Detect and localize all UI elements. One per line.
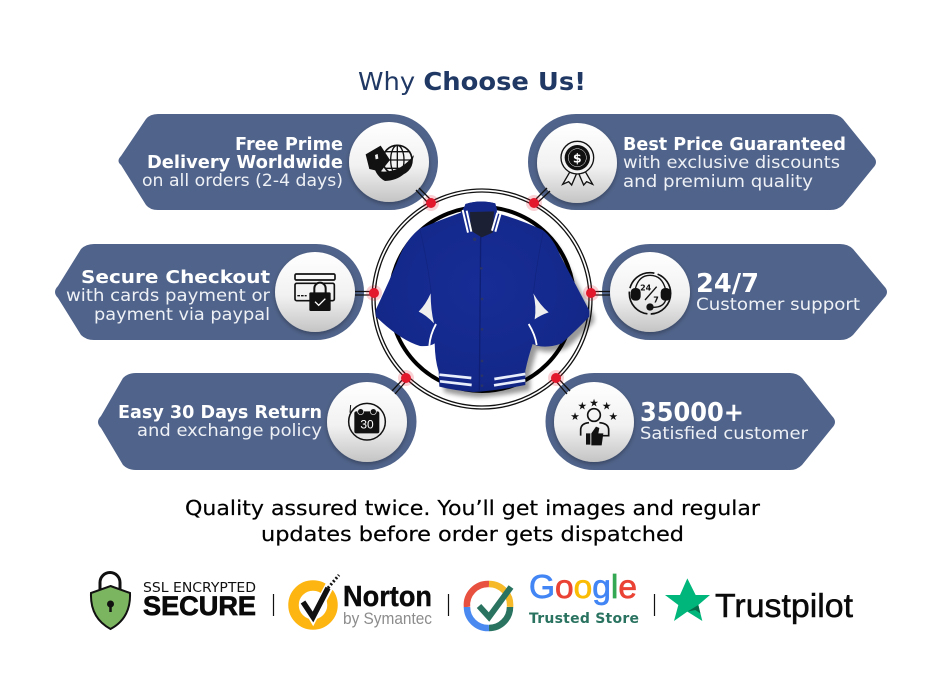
badge circle <box>275 252 355 332</box>
badge circle <box>554 382 634 462</box>
underarm gaps <box>419 293 434 323</box>
text: easy return <box>118 402 322 441</box>
icon: customer with stars: ★ <box>570 410 580 423</box>
panel: customer support <box>602 244 887 340</box>
central ring graphic <box>372 189 592 409</box>
connector dots <box>366 195 599 386</box>
text: free delivery: Delivery Worldwide <box>147 152 343 173</box>
icon: customer with stars: ★ <box>578 399 587 412</box>
badge circle <box>537 123 617 203</box>
title: Why Choose Us! <box>358 67 586 96</box>
icon: customer with stars: ★ <box>589 397 599 410</box>
logo: Trustpilot: Trustpilot <box>715 587 853 624</box>
panel: customer support: Customer support <box>696 295 860 315</box>
jacket <box>375 201 594 397</box>
text: easy return: and exchange policy <box>137 421 322 441</box>
quality statement <box>185 496 761 546</box>
logo: Trustpilot <box>665 578 853 624</box>
jacket body <box>375 201 589 392</box>
buttons <box>473 238 483 387</box>
icon: customer with stars: ★ <box>609 410 618 423</box>
logo: Norton: Norton <box>343 581 432 613</box>
logo: Norton: by Symantec <box>343 609 432 628</box>
ribbing stripes <box>439 374 525 385</box>
wordmark: Google <box>529 568 637 605</box>
icon: return calendar <box>349 403 385 440</box>
divider <box>274 594 654 616</box>
panel: secure checkout <box>55 244 364 340</box>
logo: SSL secure <box>91 572 256 629</box>
text: secure checkout: payment via paypal <box>94 305 270 325</box>
text: free delivery <box>142 134 343 191</box>
text: customer support: 24/7 <box>696 269 759 299</box>
pill shape <box>528 114 876 210</box>
icon: 24/7 headset <box>629 273 671 314</box>
text: free delivery: Free Prime <box>235 134 343 155</box>
badge circle <box>610 252 690 332</box>
icon: 24/7 headset: 24 <box>640 284 652 293</box>
panel: best price <box>528 114 876 210</box>
panel: best price: with exclusive discounts <box>623 153 840 173</box>
icon: customer with stars <box>570 397 618 445</box>
badge circle <box>327 382 407 462</box>
pill shape <box>602 244 887 340</box>
text: secure checkout: Secure Checkout <box>81 267 270 288</box>
panel: free delivery <box>118 114 438 210</box>
logo: Google trusted store: Trusted Store <box>529 611 639 627</box>
logo: Google trusted store <box>467 568 639 628</box>
panel: best price: and premium quality <box>623 172 813 192</box>
pill shape <box>546 373 835 470</box>
quality statement: Quality assured twice. You’ll get images and regular <box>185 496 761 520</box>
icon: price badge: $ <box>573 150 582 165</box>
text: free delivery: on all orders (2-4 days) <box>142 171 343 191</box>
jacket shadow <box>439 235 594 397</box>
connector lines <box>355 188 610 394</box>
icon: globe and parcel <box>366 145 414 181</box>
text: easy return: Easy 30 Days Return <box>118 402 322 423</box>
pill shape <box>118 114 438 210</box>
collar <box>470 211 494 237</box>
panel: satisfied customers: Satisfied customer <box>640 424 808 444</box>
badge circle <box>349 122 429 202</box>
logo: SSL secure: SECURE <box>143 591 256 621</box>
quality statement: updates before order gets dispatched <box>261 522 684 546</box>
pill shape <box>55 244 364 340</box>
panel: satisfied customers <box>546 373 835 470</box>
icon: 24/7 headset: 7 <box>653 295 659 304</box>
icon: coloured check ring <box>467 584 511 628</box>
icon: price badge <box>561 141 594 185</box>
logo: SSL secure: SSL ENCRYPTED <box>143 581 256 596</box>
icon: star <box>665 578 710 621</box>
text: best price: Best Price Guaranteed <box>623 134 846 155</box>
text: secure checkout: with cards payment or <box>66 286 270 306</box>
icon: return calendar: 30 <box>360 417 374 431</box>
text: satisfied customers: 35000+ <box>640 398 744 428</box>
icon: card and lock <box>295 274 335 311</box>
icon: customer with stars: ★ <box>602 399 611 412</box>
pill shape <box>98 373 417 470</box>
panel: easy return <box>98 373 417 470</box>
text: secure checkout <box>66 267 270 325</box>
logo: Norton <box>294 575 432 628</box>
